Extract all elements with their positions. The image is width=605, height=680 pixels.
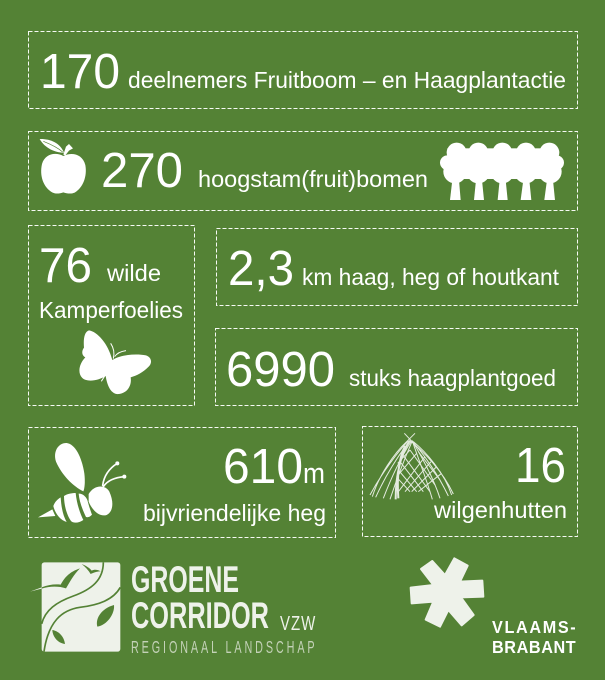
number: 610: 610 [223, 440, 303, 494]
icon: row of trees [440, 143, 564, 200]
text: VLAAMS-: VLAAMS- [492, 617, 576, 637]
text: REGIONAAL LANDSCHAP: REGIONAAL LANDSCHAP [131, 638, 315, 658]
text: plants: stuks haagplantgoed [349, 365, 556, 391]
number: 2,3: 2,3 [228, 242, 294, 296]
panel: 170 participants [28, 32, 578, 108]
logo: Groene Corridor [30, 559, 316, 658]
panel: 270 trees [28, 132, 578, 210]
icon: logo square [30, 562, 120, 652]
number: 270: 270 [101, 144, 183, 198]
panel: 6990 plants [216, 328, 578, 406]
text: trees: hoogstam(fruit)bomen [198, 166, 428, 192]
number: 6990: 6990 [226, 343, 335, 397]
text: GROENE: GROENE [131, 559, 239, 600]
panel: 16 willow huts [362, 426, 578, 536]
panel: 76 honeysuckles [28, 226, 194, 406]
icon: butterfly [79, 330, 151, 394]
number: 170: 170 [40, 45, 120, 99]
icon: willow hut [370, 433, 453, 499]
text: bee friendly hedge: bijvriendelijke heg [143, 500, 326, 526]
icon: apple [40, 139, 86, 194]
text: Kamperfoelies: Kamperfoelies [39, 297, 183, 323]
text: participants: deelnemers Fruitboom – en Haagplantactie [128, 67, 566, 93]
icon: asterisk star [411, 558, 483, 627]
unit: m: m [303, 458, 325, 490]
text: willow huts: wilgenhutten [433, 497, 567, 523]
number: 16: 16 [515, 439, 566, 493]
logo: Vlaams-Brabant [411, 558, 576, 657]
text: BRABANT: BRABANT [492, 637, 576, 657]
text: wilde: wilde [106, 260, 161, 286]
number: 76: 76 [39, 239, 92, 293]
panel: 610 m bee hedge [28, 428, 336, 538]
text: hedge length: km haag, heg of houtkant [302, 264, 559, 290]
icon: bee [38, 443, 126, 523]
text: VZW: VZW [280, 612, 316, 635]
panel: 2,3 km hedge [216, 228, 578, 306]
text: CORRIDOR: CORRIDOR [131, 595, 269, 636]
